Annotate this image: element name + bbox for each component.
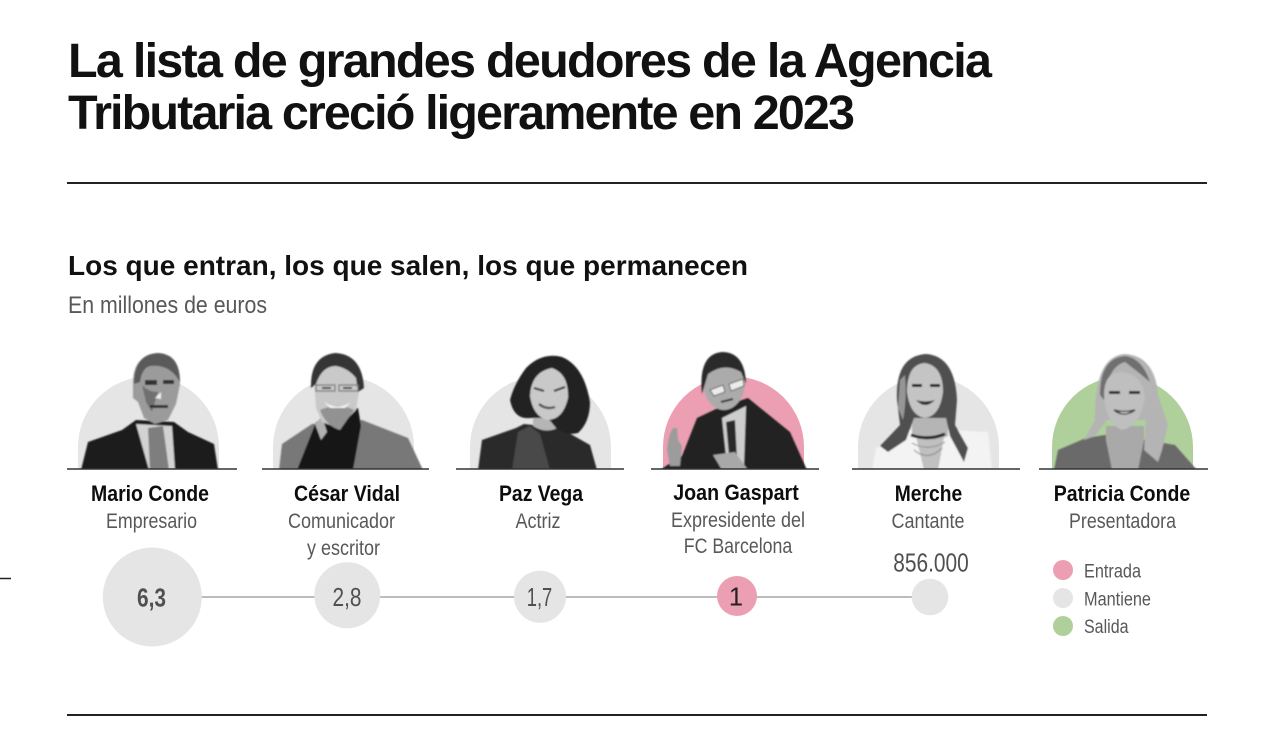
legend: Salida [1084,617,1129,638]
profile: César Vidal: César Vidal [294,481,400,506]
profile: Mario Conde: Empresario [106,510,197,533]
bubble chart: debt in millions of euros [103,548,969,646]
portrait: Joan Gaspart [660,352,807,470]
profile: Joan Gaspart: Expresidente del [671,509,805,532]
bubble: 1: 1 [729,584,743,612]
profile: Patricia Conde: Presentadora [1069,510,1176,533]
profile: Joan Gaspart [671,480,805,558]
portrait: César Vidal [273,353,423,470]
profile: Mario Conde [91,481,209,533]
bubble: 6,3 [103,548,202,646]
portrait: Paz Vega [470,356,611,470]
profile: Paz Vega [499,481,583,533]
bubble: 856.000 [893,550,969,615]
bubble: 856.000: 856.000 [893,550,969,578]
profile: Paz Vega: Actriz [516,510,560,533]
title: Tributaria creció ligeramente en 2023 [68,86,855,140]
legend: Mantiene [1084,590,1151,610]
portrait: Merche [858,354,999,470]
legend: Entrada [1084,562,1141,582]
bubble: 2,8 [314,562,380,628]
profile: Merche [892,481,964,533]
portrait: Patricia Conde [1052,354,1197,470]
bubble: 2,8: 2,8 [332,584,362,612]
profile: César Vidal: y escritor [307,537,380,560]
title: La lista de grandes deudores de la Agencia [68,34,993,88]
profile: César Vidal: Comunicador [288,510,395,533]
profile: Patricia Conde: Patricia Conde [1054,481,1190,506]
profile: Joan Gaspart: Joan Gaspart [673,480,799,505]
portrait: Mario Conde [78,353,219,470]
bubble: 6,3: 6,3 [137,584,166,612]
subtitle: Los que entran, los que salen, los que permanecen [68,250,748,281]
bubble: 1,7 [514,571,566,623]
bubble: 1,7: 1,7 [527,584,552,612]
profile: Merche: Cantante [892,510,964,533]
profile: César Vidal [288,481,400,560]
profile: Mario Conde: Mario Conde [91,481,209,506]
profile: Patricia Conde [1054,481,1190,533]
profile: Merche: Merche [895,481,962,506]
profile: Paz Vega: Paz Vega [499,481,583,506]
profile: Joan Gaspart: FC Barcelona [684,535,793,558]
legend [1053,560,1151,638]
bubble: 1 [717,576,757,616]
unit note: En millones de euros [68,292,267,319]
title [68,34,993,140]
